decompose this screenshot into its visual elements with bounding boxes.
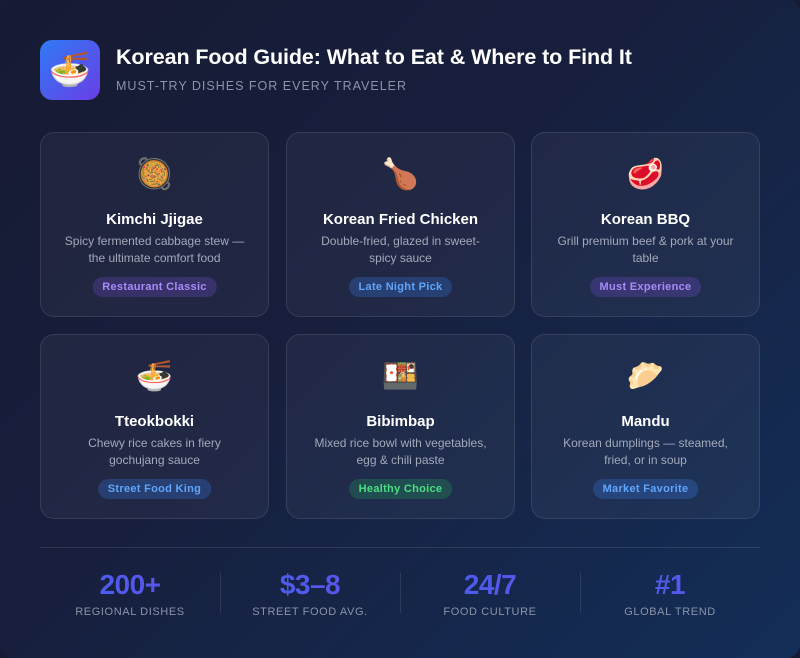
title: Korean Food Guide: What to Eat & Where to Find It: [116, 45, 632, 69]
heading: Korean BBQ: [601, 211, 690, 228]
stat: food culture: [443, 569, 537, 618]
badge: [590, 277, 701, 297]
panel: Tteokbokki: [40, 334, 269, 519]
heading: Kimchi Jjigae: [106, 211, 203, 228]
stat: global trend: [624, 569, 716, 618]
description: Chewy rice cakes in fiery gochujang sauce: [88, 436, 221, 467]
panel: Korean BBQ: [531, 132, 760, 317]
stat: global trend: GLOBAL TREND: [624, 606, 716, 618]
description: spicy sauce: [369, 251, 432, 265]
badge: [349, 479, 452, 499]
icon: dumpling: 🥟: [627, 360, 664, 393]
panel: Korean Fried Chicken: [286, 132, 515, 317]
heading: Bibimbap: [366, 413, 435, 430]
subtitle: MUST-TRY DISHES FOR EVERY TRAVELER: [116, 79, 407, 93]
icon: noodle bowl logo: [40, 40, 100, 100]
stat: global trend: #1: [655, 569, 685, 600]
icon: noodle bowl logo: 🍜: [49, 51, 91, 89]
icon: chicken leg: 🍗: [382, 158, 419, 191]
panel: Kimchi Jjigae: [40, 132, 269, 317]
stat: street food avg: $3–8: [280, 569, 340, 600]
badge: [349, 277, 452, 297]
stat: food culture: 24/7: [464, 569, 516, 600]
badge: Street Food King: [108, 483, 201, 495]
description: Korean dumplings — steamed, fried, or in soup: [563, 436, 728, 467]
badge: [593, 479, 698, 499]
icon: stew: 🥘: [136, 158, 173, 191]
heading: Korean Fried Chicken: [323, 211, 478, 228]
description: Mixed rice bowl with vegetables, egg & chili paste: [314, 436, 487, 467]
badge: Restaurant Classic: [102, 281, 207, 293]
stat: regional dishes: 200+: [99, 569, 161, 600]
stat: food culture: FOOD CULTURE: [443, 606, 537, 618]
description: Double-fried, glazed in sweet-: [321, 234, 480, 248]
stat: regional dishes: [75, 569, 185, 618]
stat: street food avg: STREET FOOD AVG.: [252, 606, 368, 618]
icon: meat: 🥩: [627, 158, 664, 191]
badge: Must Experience: [600, 281, 691, 293]
description: Grill premium beef & pork at your table: [557, 234, 734, 265]
stat: regional dishes: REGIONAL DISHES: [75, 606, 185, 618]
heading: Tteokbokki: [115, 413, 194, 430]
icon: bento: 🍱: [382, 360, 419, 393]
panel: Mandu: [531, 334, 760, 519]
panel: Bibimbap: [286, 334, 515, 519]
badge: [92, 277, 217, 297]
description: [321, 234, 480, 265]
icon: bowl: 🍜: [136, 360, 173, 393]
badge: Healthy Choice: [359, 483, 442, 495]
description: Spicy fermented cabbage stew — the ultimate comfort food: [65, 234, 244, 265]
badge: [98, 479, 211, 499]
badge: Late Night Pick: [359, 281, 442, 293]
badge: Market Favorite: [603, 483, 688, 495]
stat: street food avg: [252, 569, 368, 618]
heading: Mandu: [621, 413, 670, 430]
